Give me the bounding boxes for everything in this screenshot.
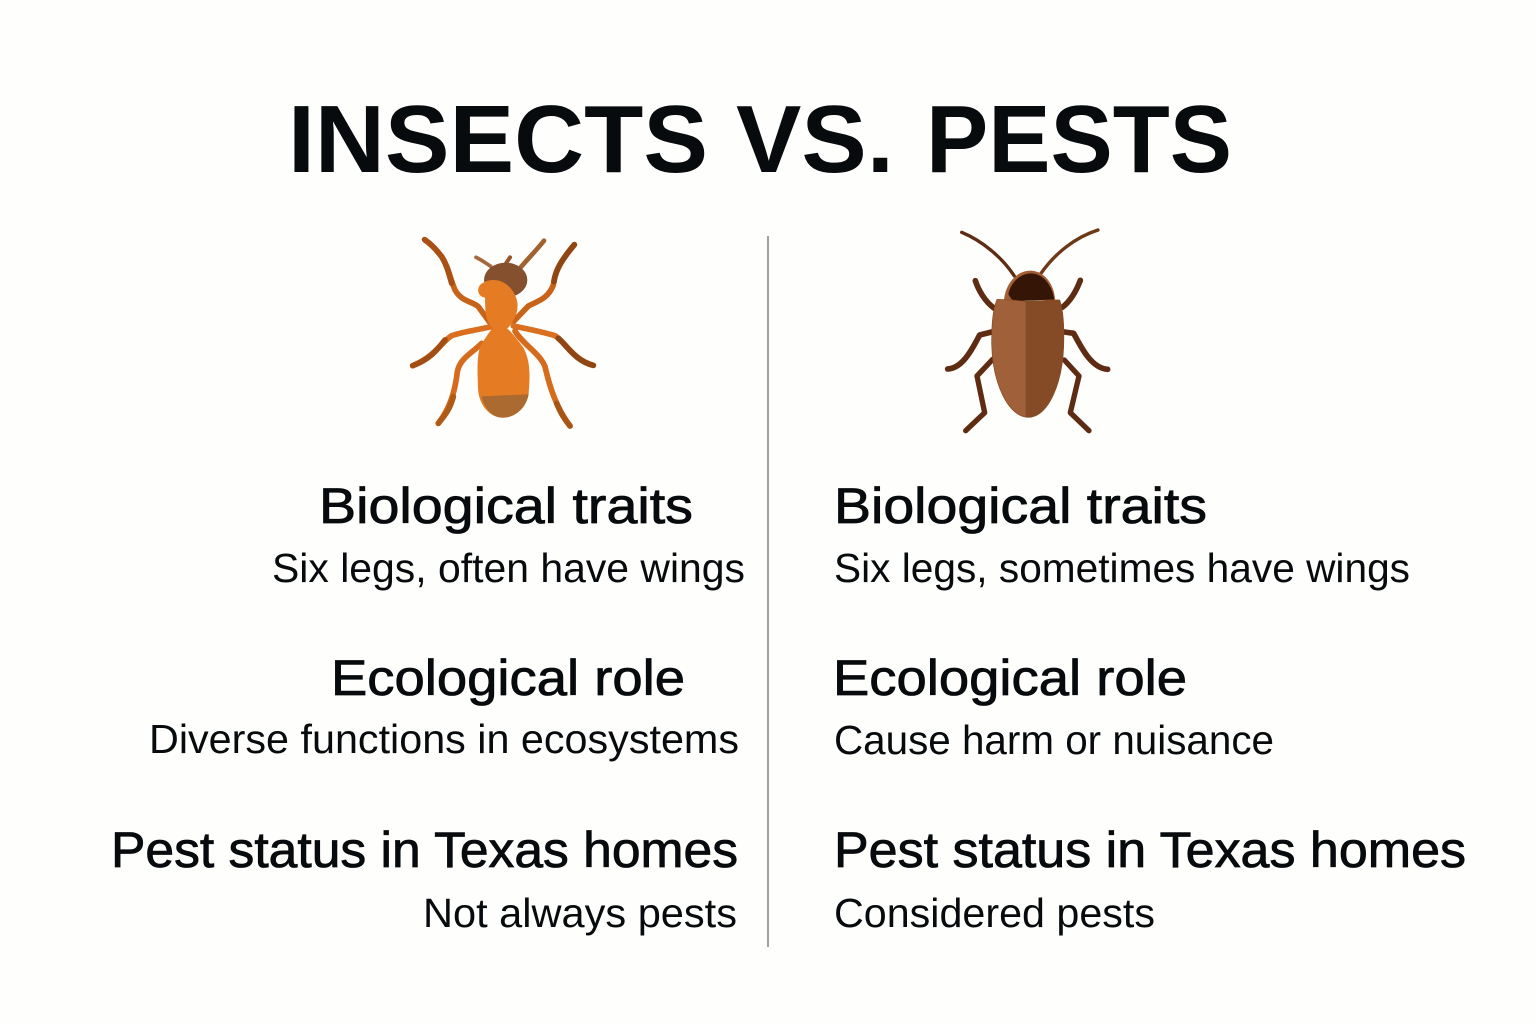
icon: orange ant xyxy=(413,240,593,426)
title: INSECTS xyxy=(288,86,708,193)
heading: ecological role (pests): Ecological role xyxy=(833,650,1187,706)
heading: biological traits (pests): Biological traits xyxy=(834,478,1207,534)
heading: pest status (pests): Pest status in Texas homes xyxy=(834,822,1466,878)
panel: pests xyxy=(833,478,1466,936)
heading: pest status (insects): Pest status in Texas homes xyxy=(111,822,738,878)
panel: insects xyxy=(111,478,745,936)
text: insects pest status: Not always pests xyxy=(423,890,737,936)
text: insects biological traits: Six legs, often have wings xyxy=(272,545,745,591)
icon: brown cockroach xyxy=(948,230,1108,431)
title: VS. xyxy=(736,86,894,193)
heading: ecological role (insects): Ecological role xyxy=(331,650,685,706)
text: pests pest status: Considered pests xyxy=(834,890,1155,936)
text: pests biological traits: Six legs, sometimes have wings xyxy=(834,545,1410,591)
text: pests ecological role: Cause harm or nuisance xyxy=(834,717,1274,763)
title: PESTS xyxy=(926,86,1232,193)
heading: biological traits (insects): Biological traits xyxy=(319,478,693,534)
text: insects ecological role: Diverse functions in ecosystems xyxy=(149,716,739,762)
